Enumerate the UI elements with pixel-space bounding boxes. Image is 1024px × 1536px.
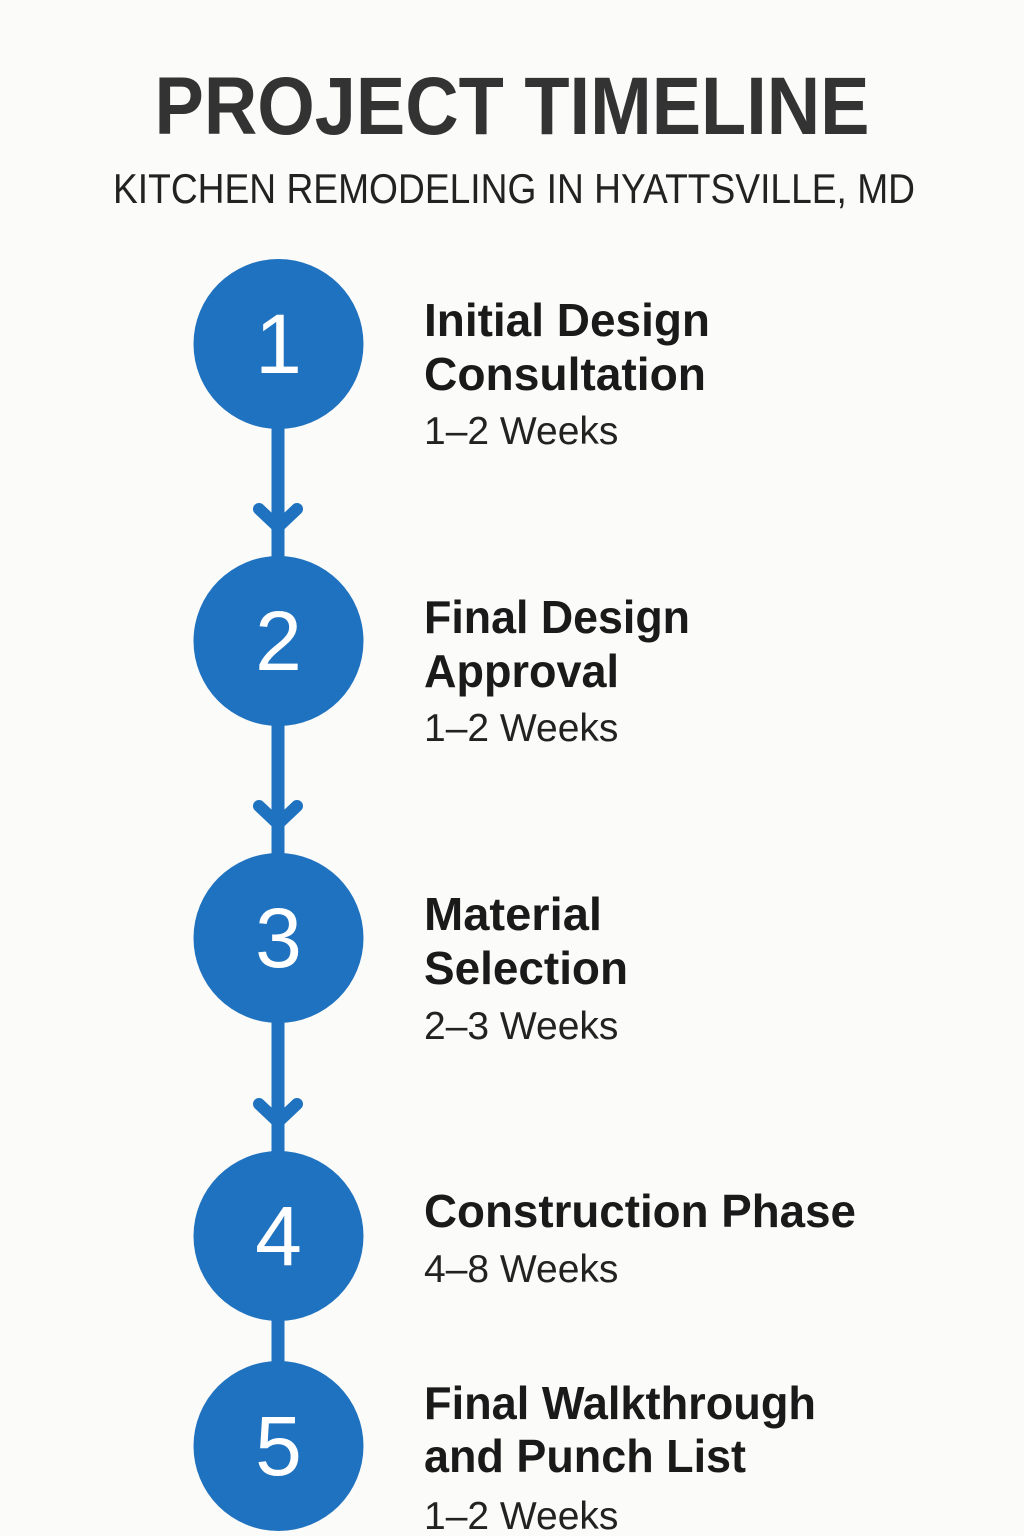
circle 5: 5 xyxy=(255,1399,302,1493)
title: PROJECT TIMELINE xyxy=(154,61,870,152)
step 4 xyxy=(194,1151,856,1321)
step 4 text: 4–8 Weeks xyxy=(424,1248,618,1291)
circle 3: 3 xyxy=(255,891,302,985)
step 3 text xyxy=(424,888,628,1048)
step 3 text: Material xyxy=(424,888,602,940)
step 1 text xyxy=(424,294,710,453)
circle 1 xyxy=(194,259,364,429)
step 1 text: Initial Design xyxy=(424,294,710,346)
subtitle: KITCHEN REMODELING IN HYATTSVILLE, MD xyxy=(113,165,915,212)
step 5 text: and Punch List xyxy=(424,1430,746,1482)
step 1 xyxy=(194,259,710,453)
step 2 xyxy=(194,556,690,750)
circle 3 xyxy=(194,853,364,1023)
arrow: 1 to 2 xyxy=(259,509,297,527)
step 4 text: Construction Phase xyxy=(424,1185,856,1237)
step 5 text: Final Walkthrough xyxy=(424,1377,816,1429)
circle 2 xyxy=(194,556,364,726)
circle 2: 2 xyxy=(255,594,302,688)
circle 5 xyxy=(194,1361,364,1531)
step 3 text: 2–3 Weeks xyxy=(424,1005,618,1048)
step 1 text: 1–2 Weeks xyxy=(424,410,618,453)
step 2 text: 1–2 Weeks xyxy=(424,707,618,750)
arrow: 3 to 4 xyxy=(259,1104,297,1122)
step 3 xyxy=(194,853,628,1048)
step 2 text xyxy=(424,591,690,750)
step 5 xyxy=(194,1361,816,1536)
step 3 text: Selection xyxy=(424,942,628,994)
step 5 text xyxy=(424,1377,816,1536)
timeline connector line xyxy=(272,344,284,1446)
circle 1: 1 xyxy=(255,297,302,391)
circle 4: 4 xyxy=(255,1189,302,1283)
circle 4 xyxy=(194,1151,364,1321)
step 1 text: Consultation xyxy=(424,348,706,400)
step 4 text xyxy=(424,1185,856,1291)
arrow: 2 to 3 xyxy=(259,806,297,824)
step 2 text: Approval xyxy=(424,645,619,697)
step 2 text: Final Design xyxy=(424,591,690,643)
